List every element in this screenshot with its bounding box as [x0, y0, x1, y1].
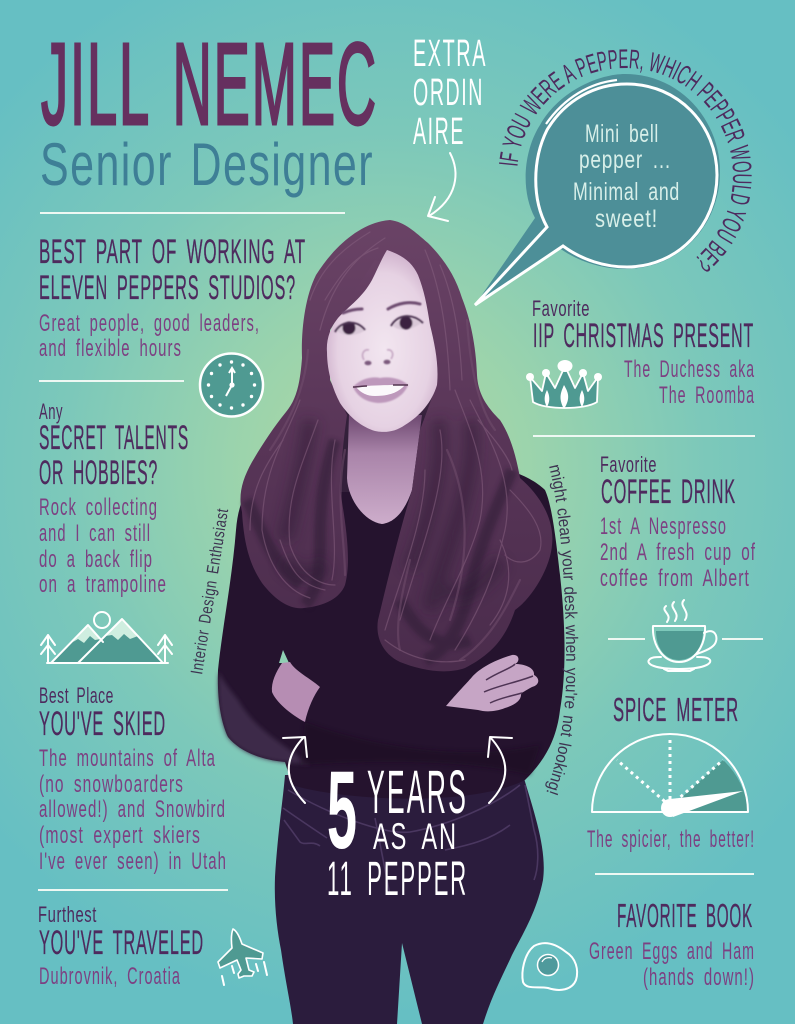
side label: interior design enthusiast: Interior Design Enthusiast: [187, 507, 232, 676]
section: skied: Best Place: [39, 683, 114, 708]
eyebrows: [343, 303, 420, 313]
speech bubble: pepper ...: [579, 146, 671, 174]
icon: plane: [218, 929, 267, 985]
section: skied: YOU'VE SKIED: [39, 705, 166, 743]
speech bubble: sweet!: [595, 205, 658, 233]
section: christmas present: Favorite: [532, 296, 590, 321]
section: best part of working: and flexible hours: [39, 335, 182, 362]
hair mass: [240, 220, 552, 671]
section: secret talents: and I can still: [39, 520, 151, 547]
icon: coffee cup: [608, 600, 763, 671]
portrait photo: YOU'VE TRAVELED: [39, 924, 204, 962]
section: secret talents: Any: [39, 399, 63, 424]
icon: clock: [200, 354, 263, 416]
section: skied: I've ever seen) in Utah: [39, 848, 227, 875]
section: skied: (most expert skiers: [39, 822, 201, 849]
section: secret talents: do a back flip: [39, 546, 153, 573]
section: secret talents: [39, 399, 189, 598]
speech bubble: [475, 74, 720, 305]
mouth: [353, 377, 408, 403]
job title: Senior Designer: [40, 131, 374, 198]
extraordinaire text: EXTRA: [413, 33, 487, 75]
speech bubble: Mini bell: [585, 120, 659, 148]
portrait photo: 11 PEPPER: [327, 853, 468, 906]
section: traveled: Furthest: [38, 902, 97, 927]
section: favorite book: [589, 897, 755, 991]
jeans: [275, 775, 544, 1024]
left hand: [272, 662, 320, 722]
icon: crown: [526, 360, 602, 409]
face: [272, 250, 538, 722]
section: traveled: Dubrovnik, Croatia: [39, 963, 181, 990]
spice meter gauge: [592, 734, 748, 817]
portrait photo: YEARS: [367, 758, 468, 826]
section: coffee drink: Favorite: [600, 452, 657, 477]
neck: [347, 415, 422, 524]
right hand: [446, 655, 538, 711]
arm gap: [279, 650, 289, 663]
section: secret talents: on a trampoline: [39, 571, 167, 598]
section: christmas present: [532, 296, 755, 409]
years badge: AS AN: [373, 816, 458, 857]
section: best part of working: [39, 233, 306, 362]
section: skied: (no snowboarders: [39, 771, 184, 798]
arrow: left up: [283, 737, 307, 803]
side label: clean your desk: might clean your desk when you're not looking!: [545, 464, 578, 796]
icon: mountains: [41, 612, 172, 663]
portrait photo: BEST PART OF WORKING AT: [39, 233, 306, 271]
nose: [363, 350, 393, 365]
section: skied: allowed!) and Snowbird: [39, 796, 226, 823]
years badge: [327, 749, 468, 906]
icon: fried egg: [522, 943, 577, 990]
portrait photo: SECRET TALENTS: [39, 419, 189, 457]
section: secret talents: Rock collecting: [39, 494, 158, 521]
section: coffee drink: [600, 452, 756, 592]
curved question: IF YOU WERE A PEPPER, WHICH PEPPER WOULD YOU BE?: [499, 49, 752, 272]
section: secret talents: OR HOBBIES?: [39, 454, 158, 492]
section: skied: [39, 683, 227, 875]
portrait photo: ELEVEN PEPPERS STUDIOS?: [39, 269, 296, 307]
arrow: right up: [488, 737, 512, 803]
speech bubble: Minimal and: [573, 178, 680, 206]
extraordinaire text: AIRE: [413, 111, 465, 153]
eyes: [335, 316, 423, 335]
section: skied: The mountains of Alta: [39, 745, 216, 772]
arrow: to portrait: [428, 153, 455, 221]
extraordinaire text: [413, 33, 487, 153]
hair behind neck: [335, 255, 435, 492]
section: best part of working: Great people, good leaders,: [39, 310, 260, 337]
portrait photo: JILL NEMEC: [41, 19, 378, 149]
extraordinaire text: ORDIN: [413, 72, 484, 114]
years badge: 5: [327, 749, 357, 872]
section: traveled: [38, 902, 204, 990]
black top: [218, 468, 565, 799]
